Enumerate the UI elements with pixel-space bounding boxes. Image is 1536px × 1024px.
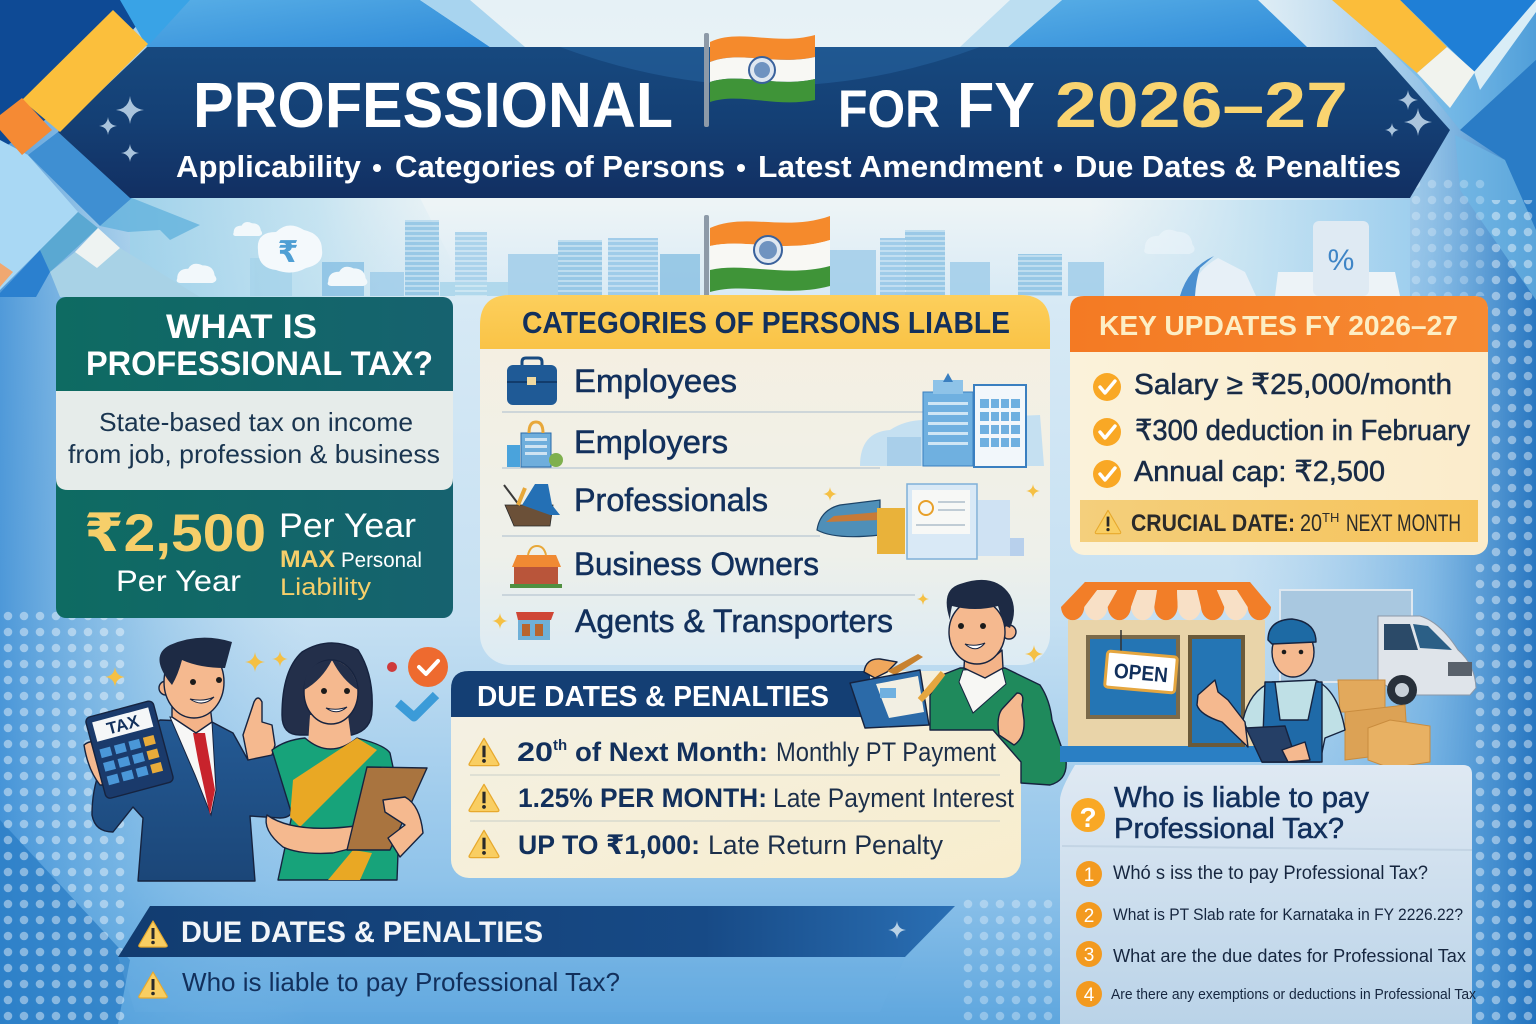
update: salary: Salary ≥ ₹25,000/month [1134,369,1452,401]
decorations around characters [105,647,448,717]
row: late interest: Late Payment Interest [773,783,1014,813]
bottom banner [118,906,955,1012]
row: monthly payment: 20 [517,737,553,767]
illustration: delivery truck [1280,590,1476,705]
row: monthly payment [469,737,996,767]
row: late return: Late Return Penalty [708,830,943,860]
calculator: TAX [105,711,142,738]
row: business owners: Business Owners [574,546,819,582]
banner question: Who is liable to pay Professional Tax? [182,967,620,997]
row: monthly payment: Monthly PT Payment [776,737,996,767]
update: deduction: ₹300 deduction in February [1135,415,1470,447]
subtitle text: Applicability [176,149,362,184]
question 2: What is PT Slab rate for Karnataka in FY 2226.22? [1113,905,1463,924]
panel: key updates [1070,296,1488,555]
title text [193,69,1348,141]
row: late interest [469,783,1014,813]
question 2: 2 [1084,906,1094,927]
amount [84,504,422,601]
question 1: Whó s iss the to pay Professional Tax? [1113,863,1428,884]
amount: ₹2,500 [84,504,266,563]
row: employers: Employers [574,424,728,460]
illustration: car and documents [817,484,1040,559]
character: businessman with tax calculator [84,638,295,881]
heading with question icon: Professional Tax? [1114,813,1344,845]
ribbons: corner accents [0,0,1475,155]
heading: CATEGORIES OF PERSONS LIABLE [522,305,1010,340]
header banner [58,47,1450,198]
definition band: State-based tax on income [99,407,413,437]
rupee cloud icon [258,225,322,273]
row: employees [507,358,737,405]
panel: who is liable to pay [1060,765,1476,1024]
amount: Per Year [116,565,241,598]
row: employees: Employees [574,363,737,399]
row: professionals [504,482,768,526]
heading: DUE DATES & PENALTIES [477,681,829,713]
definition band: from job, profession & business [68,439,440,469]
row: business owners [510,546,819,588]
header sparkles [99,90,1432,162]
illustration: shop with open sign: OPEN [1113,660,1169,687]
question 3: What are the due dates for Professional Tax [1113,946,1466,966]
question 3 [1076,941,1466,967]
question 4: 4 [1084,985,1095,1006]
illustration: stacked parcels [1338,680,1430,768]
title text: FY [957,69,1035,141]
character: delivery worker [1197,619,1345,762]
row: late interest: 1.25% PER MONTH: [518,783,767,813]
panel: what is professional tax [56,297,453,618]
rupee cloud icon: ₹ [278,236,298,269]
question 4: Are there any exemptions or deductions in Professional Tax [1111,986,1476,1003]
crucial date strip: TH [1322,510,1339,525]
row: monthly payment: th [553,737,567,754]
row: employers [507,422,728,467]
heading: KEY UPDATES FY 2026–27 [1099,310,1458,341]
amount: Per Year [279,507,416,545]
clouds [177,222,1195,286]
heading with question icon [1071,782,1369,845]
subtitle text: Categories of Persons [395,149,725,184]
row: monthly payment: of Next Month: [575,737,768,767]
row: agents and transporters: Agents & Transporters [575,603,893,639]
heading [86,308,433,383]
flag: skyline [704,215,830,299]
character: woman in green saree with book [266,643,427,880]
crucial date strip [1080,500,1478,542]
row: late return [469,830,943,860]
calculator [85,700,174,799]
question 1: 1 [1084,865,1094,886]
banner heading: DUE DATES & PENALTIES [181,916,543,949]
question 3: 3 [1084,945,1094,966]
awning [1061,582,1271,620]
crucial date strip: CRUCIAL DATE: [1131,510,1295,537]
illustration: shop with open sign [1060,582,1272,762]
amount: Personal [341,549,422,572]
crucial date strip: 20 [1300,510,1322,537]
flag: banner [704,33,815,127]
subtitle text: Latest Amendment [758,149,1043,184]
title text: 2026–27 [1055,69,1348,141]
subtitle text: Due Dates & Penalties [1075,149,1401,184]
heading: WHAT IS [166,308,317,346]
character: man in green blazer with tablet [850,580,1066,785]
definition band [56,391,453,490]
heading with question icon: Who is liable to pay [1114,782,1369,814]
title text: PROFESSIONAL [193,69,673,141]
house and percent receipt illustration: % [1328,244,1354,277]
row: professionals: Professionals [574,482,768,518]
illustration: office buildings [860,373,1044,467]
house and percent receipt illustration [1180,221,1400,296]
panel: categories of persons liable [480,295,1050,665]
panel: due dates and penalties [451,671,1021,878]
title text: FOR [838,80,940,139]
heading with question icon: ? [1079,802,1097,833]
amount: MAX [280,546,335,573]
amount: Liability [280,574,371,601]
update: cap: Annual cap: ₹2,500 [1134,456,1385,488]
row: late return: UP TO ₹1,000: [518,830,700,860]
subtitle text [176,149,1401,184]
crucial date strip: NEXT MONTH [1346,510,1461,537]
skyline illustration [250,220,1104,296]
question 2 [1076,902,1463,928]
question 4 [1076,981,1476,1007]
heading: PROFESSIONAL TAX? [86,345,433,383]
